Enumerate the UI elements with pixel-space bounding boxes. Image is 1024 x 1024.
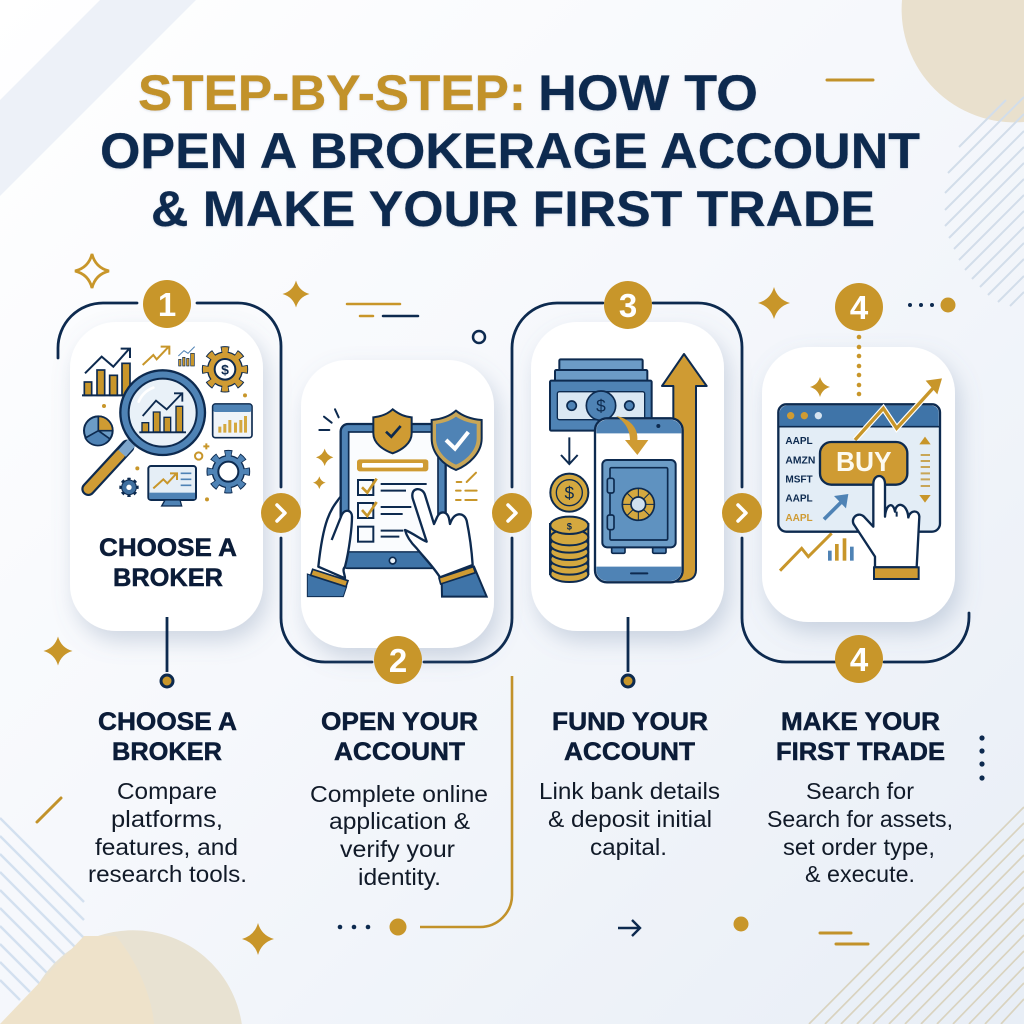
step 1 text: BROKER (112, 738, 222, 766)
gold dollar gear (206, 351, 244, 388)
safe (602, 460, 676, 553)
gold trend line lower (780, 533, 832, 571)
gold shield (373, 409, 412, 453)
pointing hand (853, 476, 919, 579)
connector line around step 4 (742, 538, 969, 662)
form bar (357, 459, 428, 471)
badge 4 bottom: 4 (850, 641, 869, 678)
gold trend line upper (855, 378, 942, 440)
step 4 text: Search for (806, 778, 914, 804)
decorative hatching bottom right (809, 807, 1024, 1024)
card 2 (301, 360, 494, 648)
gold dollar gear: $ (221, 361, 229, 377)
pie chart (84, 416, 113, 446)
blue shield (432, 411, 482, 470)
mini bars (828, 538, 854, 561)
checklist (358, 479, 427, 542)
step 4 text: set order type, (783, 834, 935, 860)
step 3 text (539, 708, 720, 860)
small gear (122, 480, 136, 495)
card 1 label (99, 534, 237, 592)
step 2 text: OPEN YOUR (321, 708, 478, 736)
card 1 label: BROKER (113, 564, 223, 592)
step 1 text: Compare (117, 778, 217, 804)
coin (550, 474, 588, 512)
down arrow (561, 437, 578, 464)
pin from card 1 (161, 617, 173, 687)
badge 4 bottom (835, 635, 883, 683)
gold connector bottom (338, 676, 512, 936)
badge 3 (604, 281, 652, 329)
gold dot bottom (734, 916, 748, 932)
step 2 text: verify your (340, 836, 455, 862)
step 4 text: MAKE YOUR (781, 708, 940, 736)
title (100, 65, 920, 237)
vertical dots right (979, 735, 985, 781)
step 2 text (310, 708, 488, 890)
tiny gold dots (102, 393, 247, 501)
badge 4 top: 4 (850, 289, 869, 326)
step 1 text: research tools. (88, 861, 247, 887)
card 1 label: CHOOSE A (99, 534, 237, 562)
title: OPEN A BROKERAGE ACCOUNT (100, 123, 920, 179)
navy arrow bottom (618, 920, 640, 936)
step 2 text: Complete online (310, 781, 488, 807)
arrow badge 2 to 3 (492, 493, 532, 533)
badge 1: 1 (158, 286, 176, 323)
step 1 text: platforms, (111, 806, 223, 832)
badge 2: 2 (389, 642, 407, 679)
attention ticks (319, 409, 339, 430)
BUY button (820, 442, 907, 485)
step 4 text (767, 708, 953, 887)
card 1 (70, 322, 263, 631)
badge 4 top (835, 283, 883, 331)
tickers (785, 436, 815, 524)
connector line around step 1 (58, 303, 281, 487)
step 1 text: features, and (95, 834, 238, 860)
blue gear (211, 454, 246, 489)
step 2 text: ACCOUNT (334, 738, 465, 766)
tickers: AMZN (785, 455, 815, 466)
up arrow (662, 354, 707, 582)
icon: tablet form with shields (307, 409, 487, 597)
scroll controls (919, 437, 931, 503)
coin: $ (565, 483, 575, 503)
blue arrow (824, 494, 848, 519)
left sparkle large (316, 449, 333, 466)
decorative circle top right (902, 0, 1024, 122)
step 3 text: capital. (590, 834, 667, 860)
coin stack: $ (567, 521, 573, 531)
sparkle card 4 (810, 377, 830, 397)
arrow badge 1 to 2 (261, 493, 301, 533)
curved arrow (616, 416, 648, 455)
decorative diagonal band (0, 0, 196, 196)
tickers: MSFT (785, 474, 813, 485)
dotted line from badge 4 (857, 335, 861, 396)
tablet (341, 424, 446, 568)
decorative hatching bottom left (0, 818, 84, 1000)
bills: $ (596, 396, 606, 416)
title: & MAKE YOUR FIRST TRADE (151, 181, 875, 237)
right accent lines (456, 473, 477, 500)
step 2 text: application & (329, 808, 470, 834)
coin stack (550, 517, 588, 582)
phone (595, 418, 683, 582)
step 3 text: Link bank details (539, 778, 720, 804)
connector line around step 3 (512, 303, 742, 487)
browser with bars (213, 404, 252, 438)
magnifier (88, 370, 205, 489)
card 4 (762, 347, 955, 622)
step 4 text: & execute. (805, 861, 915, 887)
card 3 (531, 322, 724, 631)
step 3 text: FUND YOUR (552, 708, 708, 736)
monitor (148, 466, 196, 506)
dots top right of step 4 (908, 298, 956, 312)
step 4 text: FIRST TRADE (776, 738, 945, 766)
left hand (307, 497, 352, 597)
BUY button: BUY (836, 446, 892, 477)
tickers: AAPL (785, 494, 813, 505)
decorative hatching right (945, 97, 1024, 306)
right hand (405, 489, 487, 597)
step 1 text: CHOOSE A (98, 708, 237, 736)
step 1 text (88, 708, 247, 887)
title: STEP-BY-STEP: (138, 65, 526, 121)
arrow badge 3 to 4 (722, 493, 762, 533)
tickers: AAPL (785, 436, 813, 447)
window (778, 404, 940, 532)
icon: money, phone safe and up arrow (550, 354, 707, 582)
small decorative marks (37, 304, 868, 944)
decorative beige shapes bottom left (0, 930, 242, 1024)
connector line around step 2 (281, 538, 512, 662)
step 3 text: & deposit initial (548, 806, 712, 832)
pin from card 3 (622, 617, 634, 687)
badge 3: 3 (619, 287, 637, 324)
title: HOW TO (538, 65, 758, 121)
step 4 text: Search for assets, (767, 806, 953, 832)
step 3 text: ACCOUNT (564, 738, 695, 766)
accent line near title (827, 78, 873, 82)
left sparkle small (313, 476, 326, 489)
icon: research magnifier and charts (82, 347, 252, 506)
sparkles (44, 254, 790, 955)
step 2 text: identity. (358, 864, 441, 890)
badge 2 (374, 636, 422, 684)
icon: trading window with BUY button (778, 378, 942, 579)
badge 1 (143, 280, 191, 328)
bills (550, 359, 652, 431)
tickers: AAPL (785, 513, 813, 524)
